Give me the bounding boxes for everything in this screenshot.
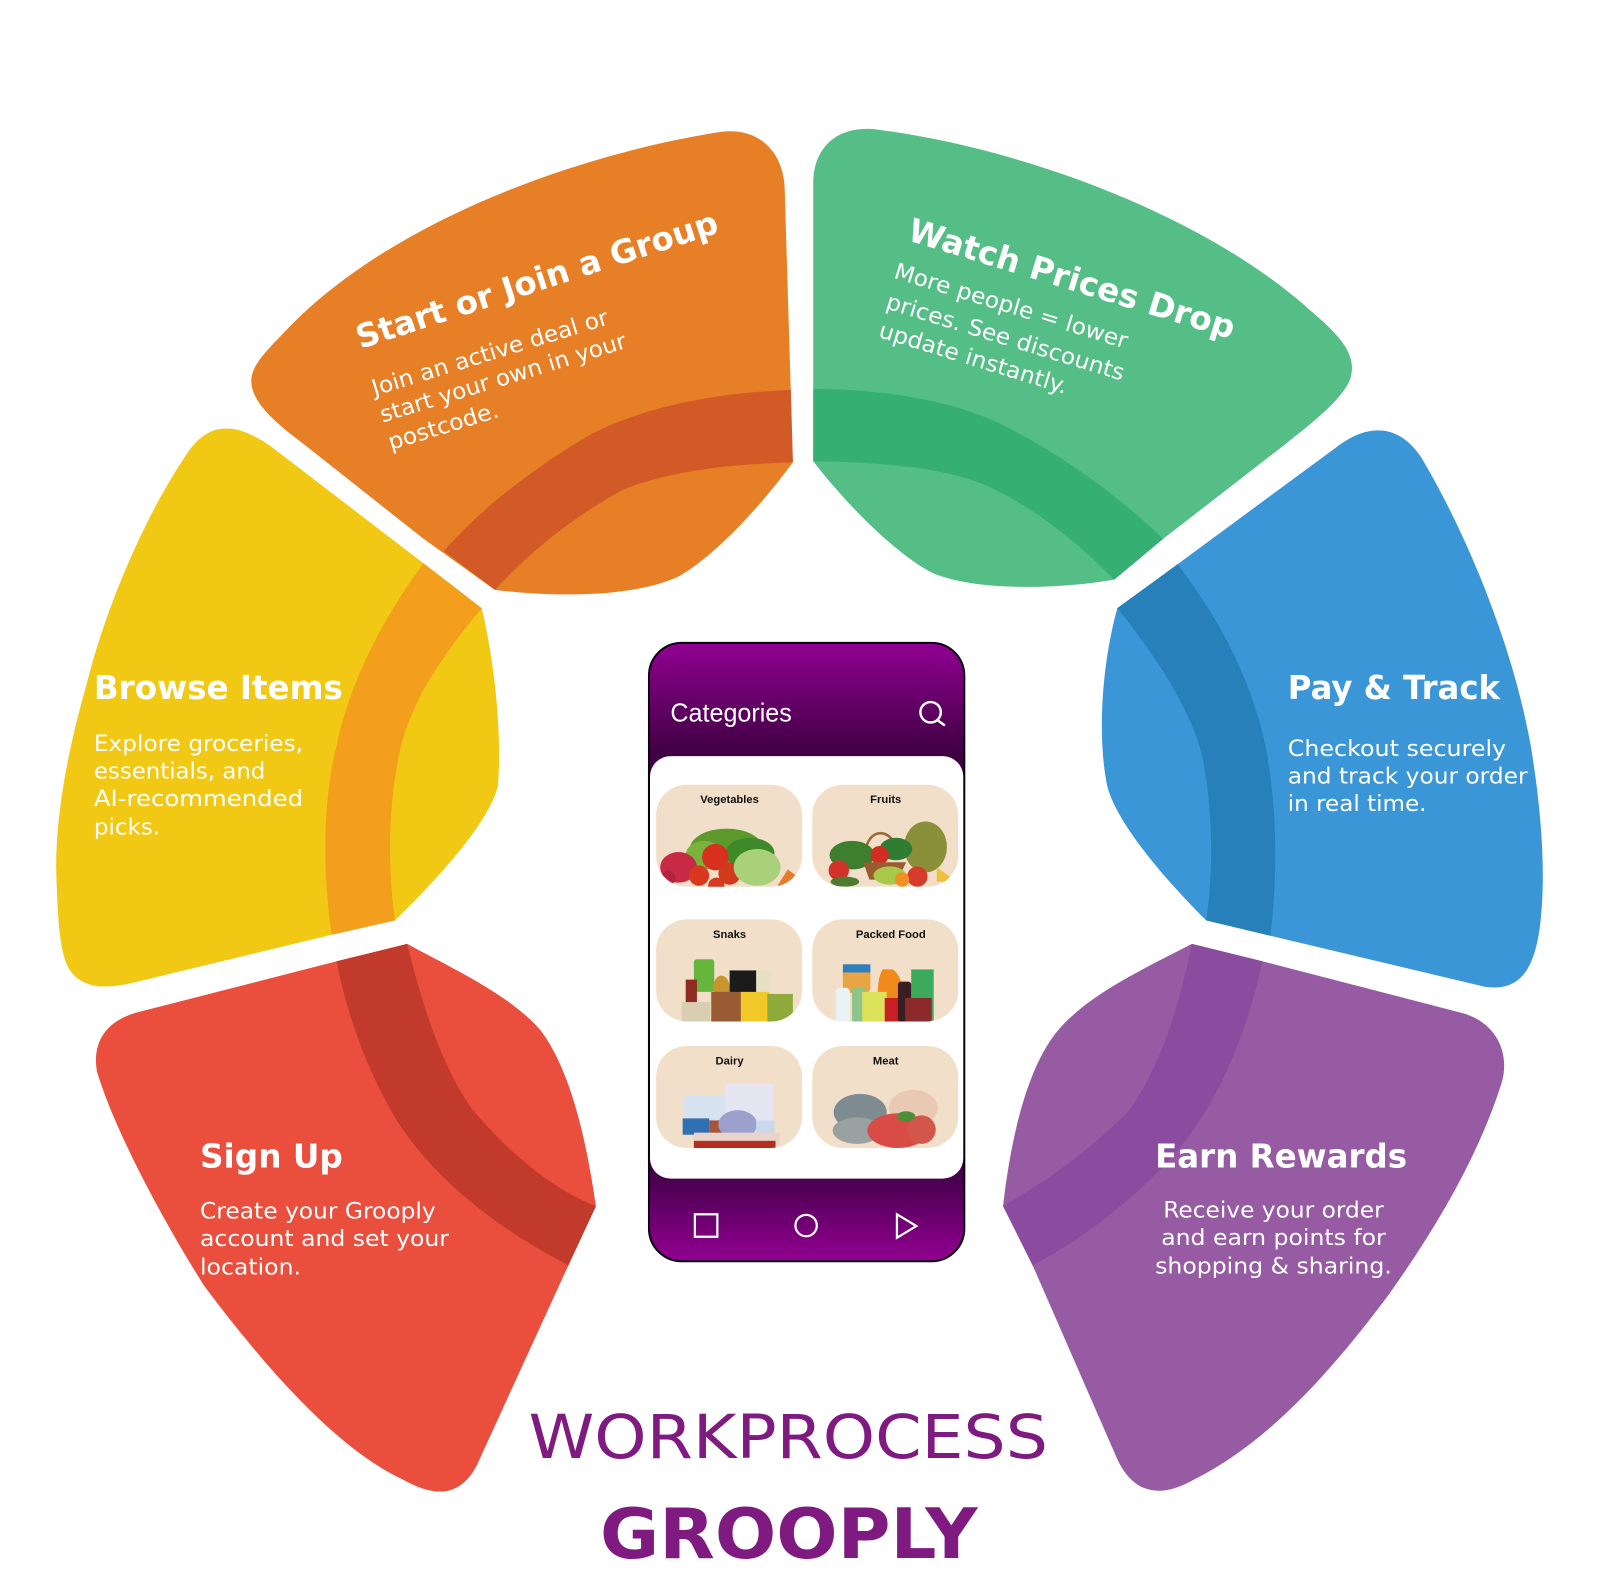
description: AI-recommended xyxy=(94,786,303,812)
red band xyxy=(337,944,596,1265)
description: location. xyxy=(200,1255,301,1281)
description: prices. See discounts xyxy=(883,289,1128,386)
yellow petal xyxy=(56,429,499,987)
description: and earn points for xyxy=(1161,1225,1387,1251)
purple petal xyxy=(1003,944,1504,1491)
description: picks. xyxy=(94,815,160,841)
card: Meat xyxy=(812,1046,958,1148)
red petal xyxy=(96,944,596,1492)
description: Receive your order xyxy=(1163,1197,1384,1223)
panel: Earn Rewards xyxy=(1003,944,1504,1491)
heading: Sign Up xyxy=(200,1137,343,1175)
description: More people = lower xyxy=(891,258,1132,355)
description: account and set your xyxy=(200,1226,450,1252)
purple band xyxy=(1003,944,1262,1265)
description: essentials, and xyxy=(94,759,265,785)
green band xyxy=(813,389,1163,580)
icon: nav triangle xyxy=(897,1214,916,1238)
panel: Start or Join a Group xyxy=(251,131,793,594)
description: Checkout securely xyxy=(1288,736,1506,762)
description: in real time. xyxy=(1288,791,1427,817)
card: Fruits xyxy=(812,785,958,887)
description: Create your Grooply xyxy=(200,1198,436,1224)
title: WORKPROCESS xyxy=(529,1403,1048,1473)
green petal xyxy=(813,129,1352,587)
screen title: Categories xyxy=(670,699,792,727)
orange petal xyxy=(251,131,793,594)
description: postcode. xyxy=(385,397,502,456)
blue petal xyxy=(1102,430,1543,987)
description: shopping & sharing. xyxy=(1155,1253,1392,1279)
card: Vegetables xyxy=(656,785,802,894)
description xyxy=(876,258,1132,400)
heading: Watch Prices Drop xyxy=(904,211,1240,347)
panel: Watch Prices Drop xyxy=(813,129,1352,587)
card: Snaks: Snaks xyxy=(713,929,746,941)
description: Join an active deal or xyxy=(367,305,612,402)
description xyxy=(200,1198,450,1281)
heading: Pay & Track xyxy=(1288,669,1501,707)
panel: Browse Items xyxy=(56,429,499,987)
card: Packed Food: Packed Food xyxy=(856,929,926,941)
card: Vegetables: Vegetables xyxy=(700,794,759,806)
card: Packed Food xyxy=(812,919,958,1022)
phone body xyxy=(649,643,964,1261)
orange band xyxy=(444,390,793,590)
content panel xyxy=(650,756,963,1179)
icon: search xyxy=(920,702,945,726)
heading: Start or Join a Group xyxy=(351,203,723,357)
panel: Pay & Track xyxy=(1102,430,1543,987)
blue band xyxy=(1117,564,1275,936)
card: Snaks xyxy=(656,919,802,1022)
description: update instantly. xyxy=(876,318,1071,400)
card: Dairy: Dairy xyxy=(716,1055,744,1067)
description xyxy=(1288,736,1528,817)
brand name: GROOPLY xyxy=(600,1495,978,1575)
icon: nav square xyxy=(695,1214,717,1237)
description: Explore groceries, xyxy=(94,731,303,757)
description xyxy=(94,731,303,841)
phone mockup xyxy=(649,643,964,1261)
heading: Browse Items xyxy=(94,669,343,707)
icon: nav circle xyxy=(795,1215,817,1236)
card: Meat: Meat xyxy=(873,1055,899,1067)
description: start your own in your xyxy=(377,328,630,428)
heading: Earn Rewards xyxy=(1155,1137,1407,1175)
description: and track your order xyxy=(1288,764,1528,790)
description xyxy=(1155,1197,1392,1279)
yellow band xyxy=(325,563,482,935)
card: Fruits: Fruits xyxy=(870,794,901,806)
description xyxy=(367,305,630,456)
card: Dairy xyxy=(656,1046,802,1149)
panel: Sign Up xyxy=(96,944,596,1492)
